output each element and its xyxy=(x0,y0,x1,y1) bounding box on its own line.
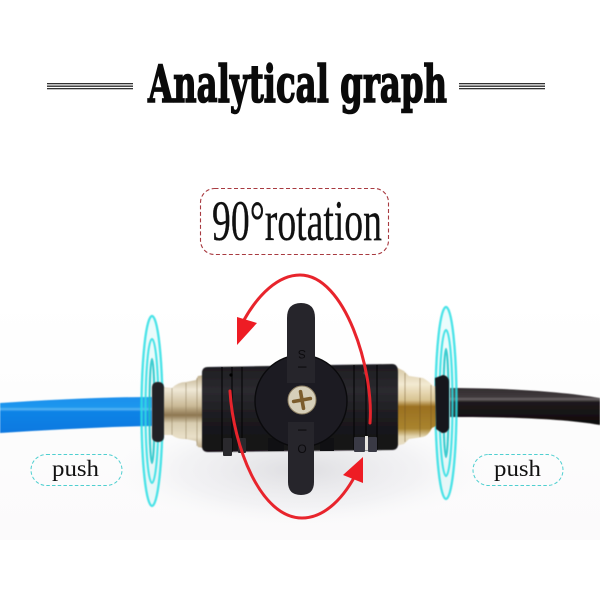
central disc xyxy=(255,355,347,447)
title rule right xyxy=(459,83,545,89)
right clips xyxy=(354,436,377,452)
push label right: push xyxy=(494,456,542,481)
lever handle xyxy=(287,303,315,495)
right brass fitting xyxy=(396,367,436,446)
black tube xyxy=(450,388,600,425)
left brass fitting xyxy=(163,375,204,448)
left clips xyxy=(223,438,246,456)
push label left xyxy=(31,454,122,486)
photo backdrop xyxy=(0,300,600,540)
right cyan push rings xyxy=(436,307,456,499)
handle marks: I xyxy=(295,365,309,369)
soft floor shadow xyxy=(100,408,500,532)
callout: 90 degree rotation: 90°rotation xyxy=(212,190,382,253)
handle marks: I xyxy=(295,428,309,432)
right collar xyxy=(435,375,449,433)
red rotation arrow: bottom xyxy=(230,391,363,518)
valve body xyxy=(202,364,398,452)
left collar xyxy=(152,382,164,442)
push label right xyxy=(473,454,563,486)
valve holes xyxy=(229,371,367,377)
left cyan push rings xyxy=(142,316,162,506)
screw xyxy=(288,386,316,414)
handle marks: O xyxy=(297,442,307,456)
red rotation arrow: top xyxy=(237,275,370,423)
blue tube xyxy=(0,397,152,433)
push label left: push xyxy=(52,456,100,481)
handle marks xyxy=(295,347,309,456)
body grooves xyxy=(222,365,377,452)
valve xyxy=(152,303,449,495)
lower body tabs xyxy=(268,438,334,451)
handle marks: S xyxy=(298,347,306,361)
callout: 90 degree rotation xyxy=(200,188,388,254)
title rule left xyxy=(47,83,133,89)
